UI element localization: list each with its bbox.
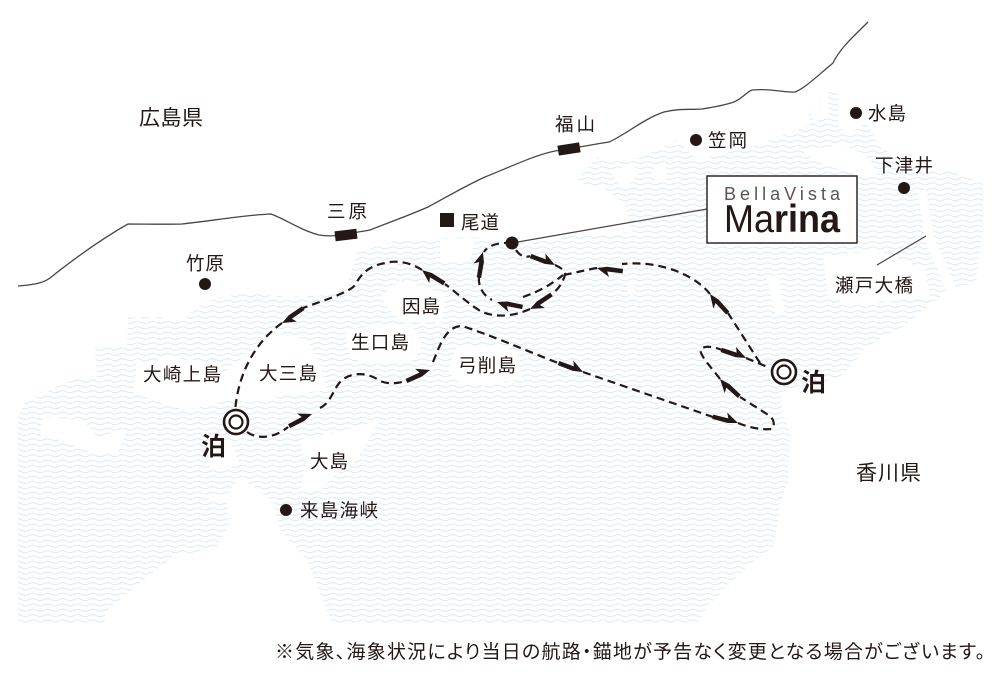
label: 下津井: 下津井 bbox=[875, 155, 933, 176]
label: 笠岡: 笠岡 bbox=[708, 130, 747, 151]
label: 瀬戸大橋: 瀬戸大橋 bbox=[835, 275, 913, 296]
leader line: 瀬戸大橋 bbox=[877, 236, 926, 265]
label: 竹原: 竹原 bbox=[186, 253, 224, 274]
marker: 水島 bbox=[850, 107, 862, 119]
marker: 尾道 bbox=[440, 213, 454, 227]
marker: marina origin bbox=[506, 236, 518, 250]
logo box: Bella Vista Marina bbox=[707, 176, 857, 243]
marker: 来島海峡 bbox=[280, 504, 292, 516]
label: 弓削島: 弓削島 bbox=[458, 355, 516, 376]
marker: 笠岡 bbox=[690, 134, 702, 146]
label: 大崎上島: 大崎上島 bbox=[143, 364, 221, 385]
icon: overnight stop east bbox=[772, 360, 796, 384]
label: 泊 east: 泊 bbox=[801, 369, 826, 397]
station: 福山 bbox=[557, 142, 581, 156]
marker: 竹原 bbox=[199, 278, 211, 290]
label: 大島: 大島 bbox=[310, 451, 348, 472]
leader line: marina bbox=[512, 209, 707, 243]
label: 水島: 水島 bbox=[868, 103, 906, 124]
label: 三原: 三原 bbox=[327, 201, 367, 222]
label: 香川県: 香川県 bbox=[856, 462, 921, 485]
label: 広島県: 広島県 bbox=[139, 107, 203, 130]
white land and islands bbox=[40, 145, 960, 626]
station: 三原 bbox=[334, 229, 358, 241]
label: 大三島: 大三島 bbox=[259, 363, 317, 384]
sea: wave pattern with islands bbox=[18, 90, 983, 626]
label: 福山: 福山 bbox=[555, 114, 595, 135]
logo box: Bella Vista Marina: Marina bbox=[724, 198, 840, 241]
coastline bbox=[18, 22, 868, 286]
label: 因島: 因島 bbox=[402, 296, 440, 317]
labels: prefectures, ports and islands bbox=[139, 103, 933, 521]
label: 来島海峡: 来島海峡 bbox=[300, 500, 378, 521]
marker: 下津井 bbox=[898, 182, 910, 194]
dashed cruise route bbox=[235, 243, 774, 437]
logo box: Bella Vista Marina: BellaVista bbox=[724, 184, 841, 204]
label: 泊 west: 泊 bbox=[201, 433, 226, 461]
footnote: ※気象、海象状況により当日の航路・錨地が予告なく変更となる場合がございます。 bbox=[275, 640, 985, 663]
label: 生口島: 生口島 bbox=[351, 332, 409, 353]
label: 尾道: 尾道 bbox=[461, 212, 499, 233]
icon: overnight stop west bbox=[224, 410, 248, 434]
route arrows bbox=[281, 249, 748, 428]
